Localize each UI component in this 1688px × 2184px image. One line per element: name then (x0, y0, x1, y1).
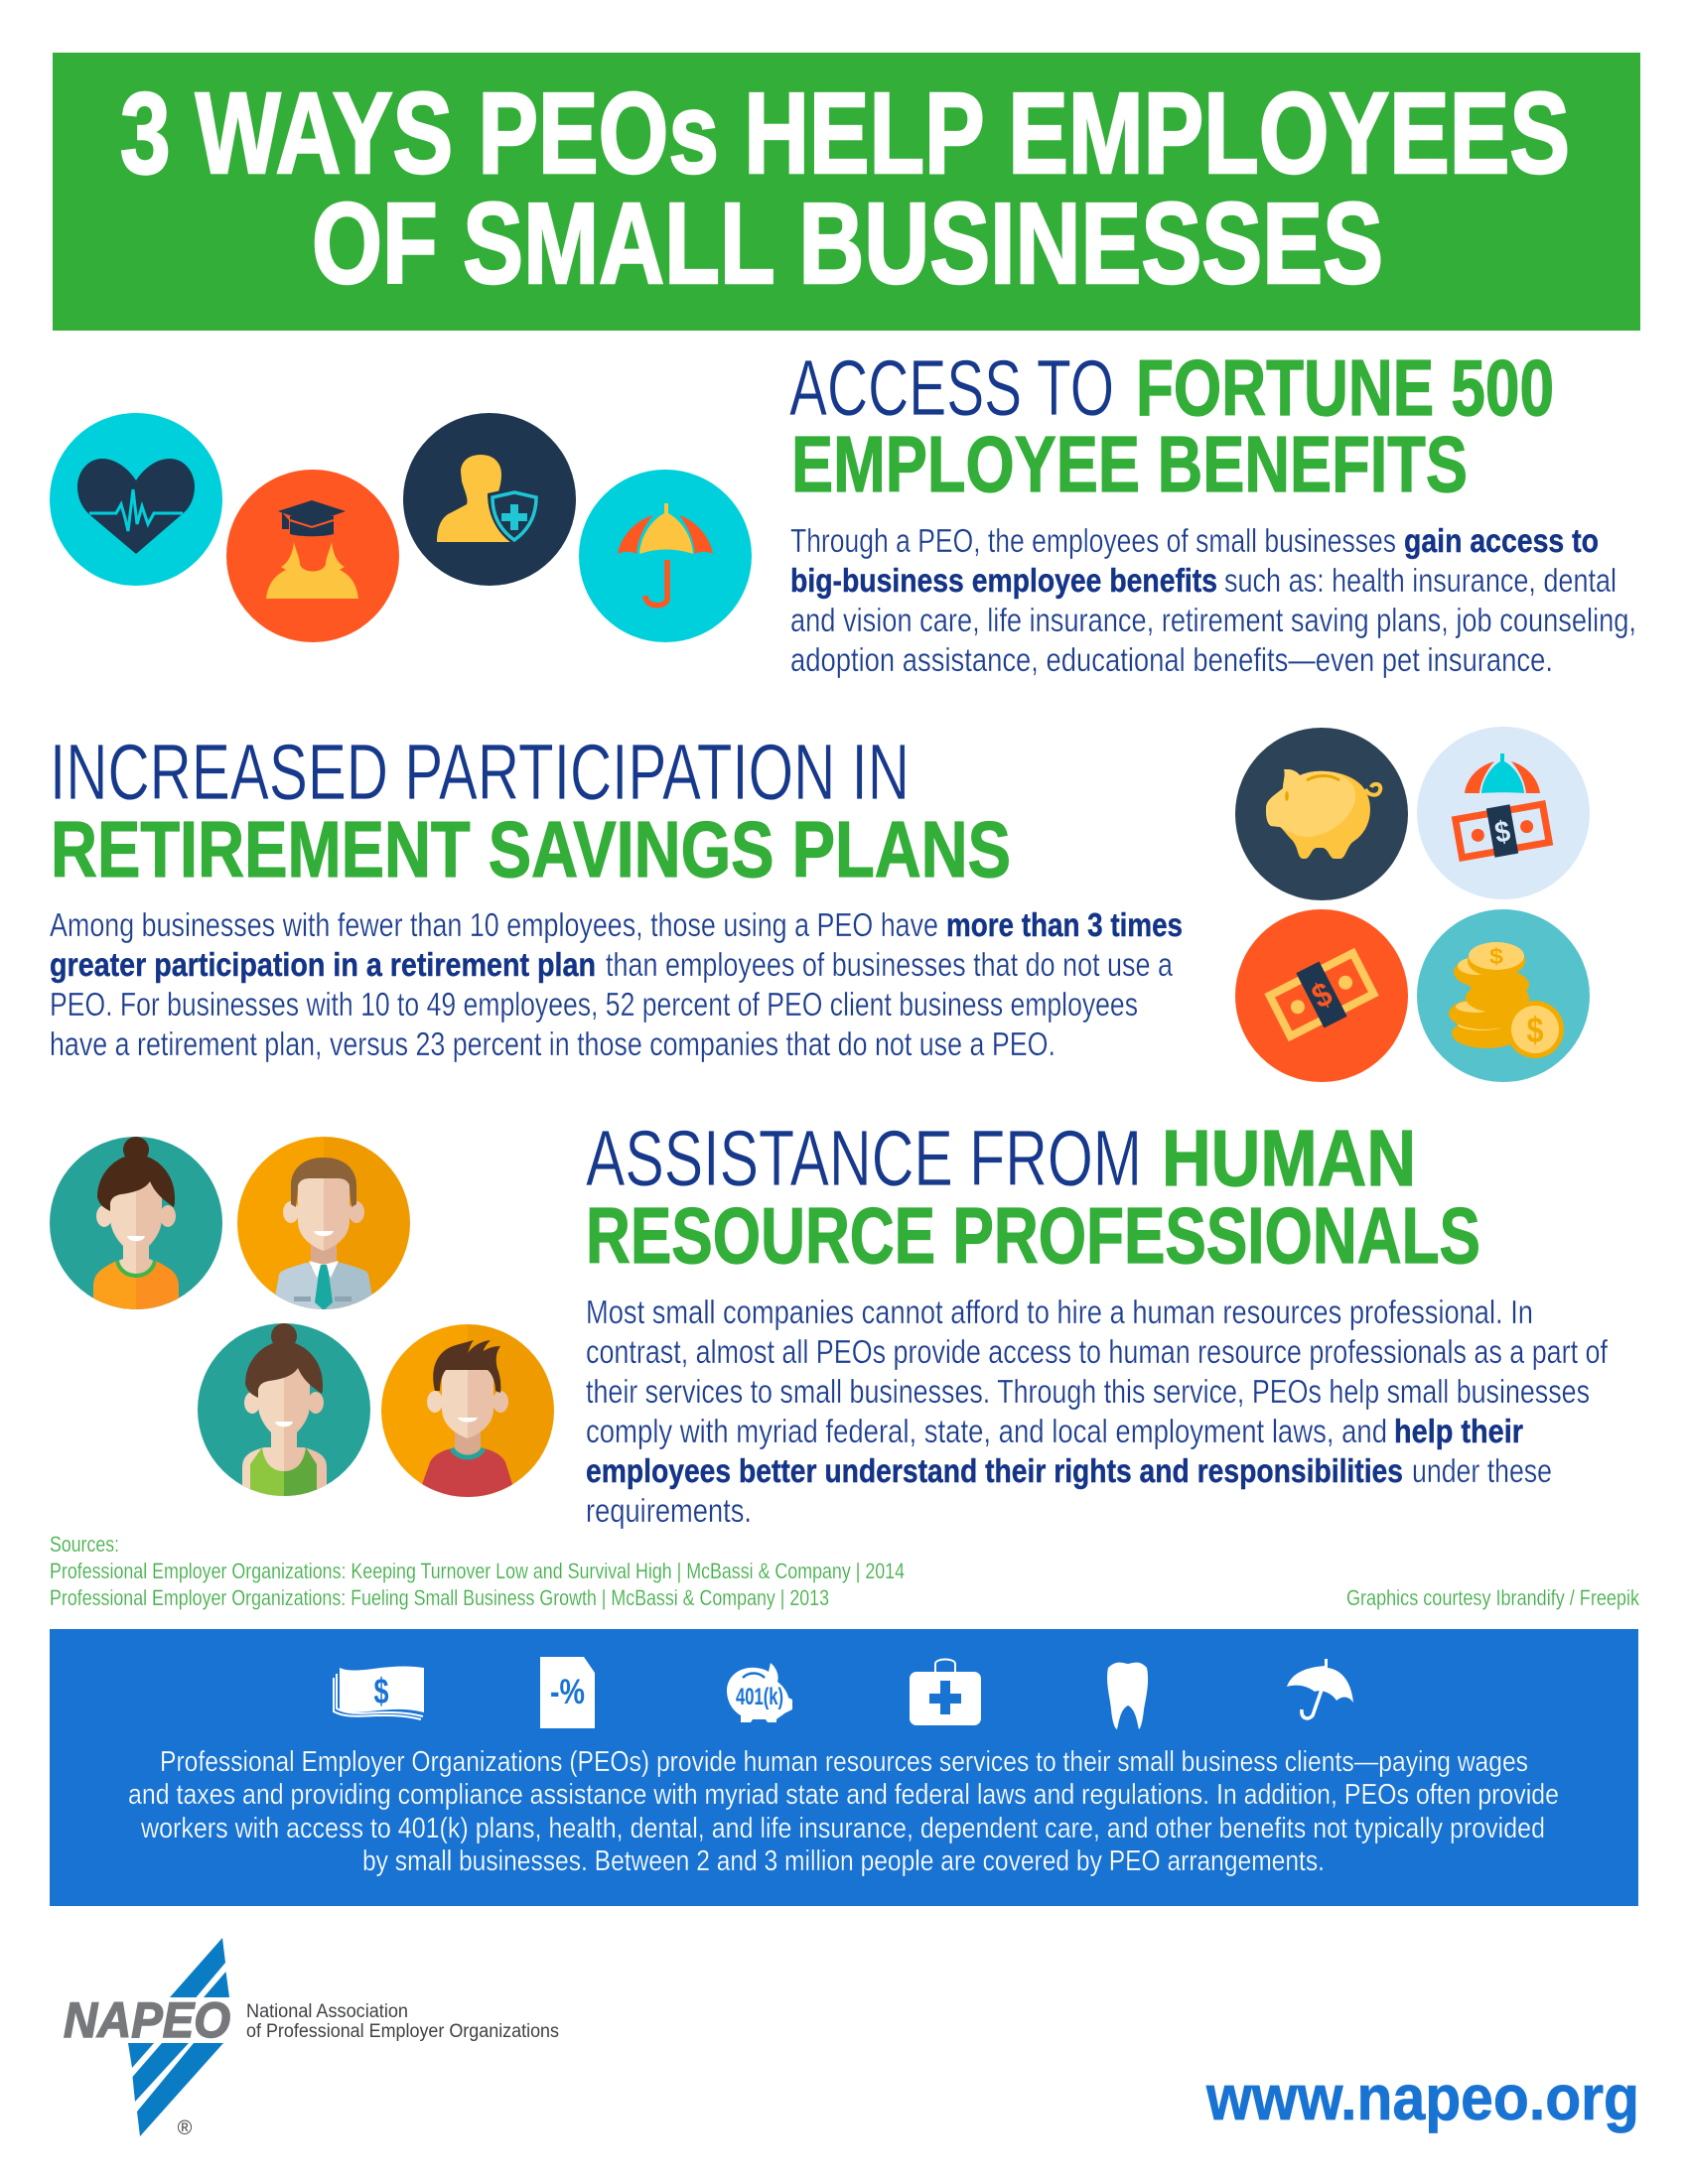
heading (586, 1114, 1480, 1280)
logo name: of Professional Employer Organizations (246, 2021, 559, 2042)
title (120, 68, 1570, 308)
body text: help their (1394, 1413, 1523, 1449)
heading: ASSISTANCE FROM (586, 1114, 1142, 1202)
icon: heart with pulse (50, 413, 222, 586)
icon: 401k piggy bank: 401(k) (736, 1684, 783, 1710)
sources: Sources: (50, 1532, 119, 1557)
body text: greater participation in a retirement plan (50, 946, 596, 983)
body text: requirements. (586, 1492, 752, 1529)
icon: money under umbrella: $ (1492, 815, 1513, 850)
heading (789, 343, 1554, 508)
icon: coins: $ (1527, 1010, 1543, 1050)
body text: under these (1412, 1452, 1552, 1489)
body text: have a retirement plan, versus 23 percent in those companies that do not use a PEO. (50, 1025, 1055, 1062)
icon: umbrella (1287, 1659, 1353, 1718)
body text (50, 906, 1183, 1062)
icon: cash stack: $ (373, 1671, 389, 1711)
icon: man with tie (236, 1136, 411, 1312)
body text: than employees of businesses that do not use a (606, 946, 1174, 983)
body text: employees better understand their rights and responsibilities (586, 1452, 1403, 1489)
icon: piggy bank (1235, 728, 1408, 900)
panel: benefits icons (50, 413, 752, 642)
icon: cash stack (334, 1666, 424, 1719)
icon: percent document: -% (550, 1673, 585, 1711)
body text: PEO. For businesses with 10 to 49 employees, 52 percent of PEO client business employees (50, 986, 1138, 1023)
icon: money bill (1235, 909, 1408, 1082)
body text: more than 3 times (946, 906, 1183, 943)
logo name (246, 2001, 559, 2042)
sources: Professional Employer Organizations: Keeping Turnover Low and Survival High | McBassi & Company | 2014 (50, 1559, 905, 1583)
panel: retirement savings text (50, 728, 1183, 1062)
heading (50, 728, 1011, 893)
heading: EMPLOYEE BENEFITS (791, 420, 1468, 508)
NAPEO logo (64, 1938, 559, 2139)
body text (586, 1294, 1609, 1529)
heading: RETIREMENT SAVINGS PLANS (51, 805, 1011, 893)
body text: Through a PEO, the employees of small businesses (790, 522, 1396, 559)
heading: INCREASED PARTICIPATION IN (50, 728, 910, 816)
logo mark (64, 1938, 230, 2139)
panel: human resource text (586, 1114, 1609, 1529)
icon: tooth (1107, 1663, 1148, 1729)
body text: comply with myriad federal, state, and local employment laws, and (586, 1413, 1387, 1449)
logo mark: ® (178, 2117, 193, 2139)
icon: first aid kit (910, 1660, 981, 1725)
sources (50, 1532, 905, 1610)
icon: man with spiky hair (380, 1323, 555, 1500)
website url: www.napeo.org (1205, 2062, 1639, 2133)
sources: Professional Employer Organizations: Fueling Small Business Growth | McBassi & Company | 2013 (50, 1585, 829, 1610)
band text (128, 1746, 1559, 1877)
icon: coins (1417, 909, 1590, 1082)
logo mark: NAPEO (64, 1992, 230, 2048)
body text: adoption assistance, educational benefits—even pet insurance. (790, 641, 1553, 678)
icon: 401k piggy bank (727, 1663, 792, 1722)
title banner (53, 53, 1640, 331)
panel: savings icons (1235, 727, 1590, 1082)
body text: big-business employee benefits (790, 562, 1217, 599)
panel: fortune 500 benefits text (789, 343, 1636, 678)
icon: person with shield (403, 413, 576, 586)
icon: money bill: $ (1306, 975, 1338, 1017)
band text: by small businesses. Between 2 and 3 million people are covered by PEO arrangements. (362, 1845, 1325, 1877)
icon: woman with orange top (49, 1136, 223, 1312)
body text (790, 522, 1636, 678)
icon: umbrella (579, 470, 752, 642)
icon: coins: $ (1489, 944, 1503, 969)
panel: people icons (49, 1136, 555, 1500)
heading: FORTUNE 500 (1136, 343, 1554, 432)
heading: ACCESS TO (789, 343, 1114, 432)
heading: HUMAN (1162, 1114, 1416, 1202)
body text: gain access to (1404, 522, 1599, 559)
icon: percent document (540, 1657, 595, 1728)
body text: Among businesses with fewer than 10 employees, those using a PEO have (50, 906, 938, 943)
icon: woman with green top (197, 1322, 371, 1499)
icon: graduate (226, 470, 399, 642)
logo name: National Association (246, 2001, 408, 2022)
panel: PEO summary band (50, 1629, 1638, 1906)
title: OF SMALL BUSINESSES (312, 179, 1383, 308)
icon: money under umbrella (1417, 727, 1590, 899)
